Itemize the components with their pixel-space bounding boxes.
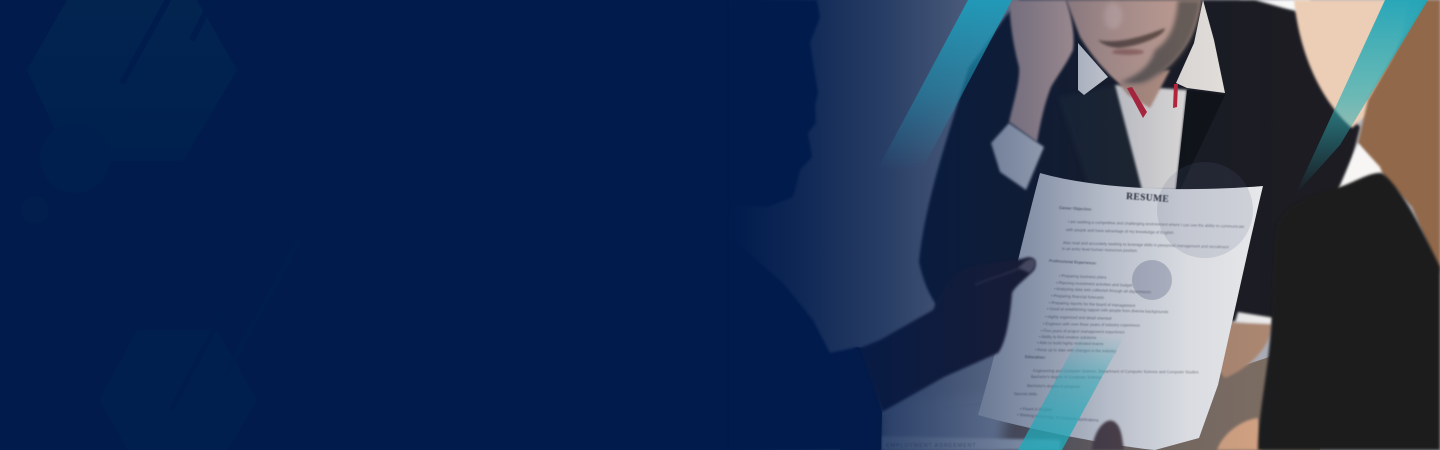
left lapel shading <box>1058 85 1142 190</box>
resume body text: Bachelor's degree in Computer Science <box>1031 374 1102 380</box>
reader arm and hand <box>860 257 1036 412</box>
resume body text: • Able to build highly motivated teams <box>1037 340 1103 346</box>
office wall <box>730 0 1440 450</box>
resume body text: Engineering and Computer Science, Department of Computer Science and Computer Studies <box>1033 368 1199 374</box>
teal band top centre <box>877 0 1012 170</box>
teal band bottom centre <box>1018 335 1125 450</box>
resume body text: • Keep up to date with changes in the industry <box>1035 347 1116 353</box>
man moustache and lips <box>1098 28 1165 55</box>
woman hair <box>1358 0 1440 275</box>
man beard <box>1120 0 1201 84</box>
man shirt <box>1115 85 1187 190</box>
reader silhouette <box>730 0 881 450</box>
reader finger highlights <box>975 268 1020 285</box>
man neck <box>1108 70 1170 108</box>
resume body text: Professional Experience: <box>1049 258 1097 266</box>
resume body text: Also read and accurately seeking to leverage skills in personnel management and recruitment <box>1063 240 1230 249</box>
small translucent circle <box>1132 260 1172 300</box>
large translucent circle <box>1157 162 1253 258</box>
woman hand <box>1217 418 1262 450</box>
resume body text: Bachelor's degree in progress <box>1027 383 1080 389</box>
resume body text: • Planning investment activities and budget <box>1056 280 1133 288</box>
resume body text: • Preparing financial forecasts <box>1051 293 1104 300</box>
resume body text: • Highly organized and detail oriented <box>1045 314 1111 321</box>
agreement sheet: EMPLOYMENT AGREEMENT <box>886 443 976 449</box>
man nose <box>1104 3 1122 29</box>
shirt cuff <box>991 123 1044 190</box>
resume body text: with people and have advantage of my knowledge of English. <box>1066 227 1175 235</box>
collar stripes <box>1127 84 1178 118</box>
man raised hand <box>1009 0 1074 142</box>
woman jacket <box>1258 173 1440 450</box>
resume body text: • Fluent in English <box>1020 406 1052 412</box>
resume body text: • Preparing reports for the board of management <box>1049 300 1136 308</box>
resume body text: • Good at establishing rapport with people from diverse backgrounds <box>1047 306 1168 314</box>
resume body text: Special skills: <box>1014 391 1038 396</box>
right collar <box>1176 0 1225 93</box>
resume body text: • Engineer with over three years of industry experience <box>1043 321 1141 328</box>
thumb at bottom of sheet <box>1092 421 1124 450</box>
resume body text: • Preparing business plans <box>1059 273 1107 280</box>
woman collar <box>1338 143 1384 190</box>
resume body text: in an entry level human resources position. <box>1062 246 1138 253</box>
resume body text: • Analyzing data sets collected through all departments <box>1054 286 1151 294</box>
table <box>880 340 1320 450</box>
resume body text: • Working knowledge of computer applications <box>1017 412 1099 423</box>
woman skin <box>1294 0 1410 128</box>
right lapel <box>1176 90 1225 190</box>
resume body text: • Ability to find creative solutions <box>1039 334 1096 340</box>
photo scene <box>730 0 1440 450</box>
reader thumbnail on sheet <box>1018 259 1036 273</box>
man jacket <box>919 0 1360 322</box>
decorative hexagon bottom left <box>99 242 298 450</box>
resume body text: • Five years of project management experience <box>1041 328 1125 334</box>
resume sheet <box>978 173 1263 450</box>
agreement sheet <box>880 436 1060 450</box>
resume body text: Education: <box>1025 354 1046 360</box>
man lower cuff and hand <box>1218 312 1275 378</box>
left collar <box>1078 43 1108 95</box>
reader sleeve <box>835 347 882 450</box>
decorative hexagons top left <box>21 0 237 224</box>
resume body text: Career Objective: <box>1059 205 1092 212</box>
resume body text <box>1014 205 1245 423</box>
teal band top right <box>1295 0 1428 195</box>
navy gradient overlay <box>730 0 1300 450</box>
resume heading: RESUME <box>1126 192 1169 205</box>
resume body text: I am seeking a competitive and challenging environment where I can use the ability to communicate <box>1068 219 1245 229</box>
man face <box>1066 0 1201 85</box>
